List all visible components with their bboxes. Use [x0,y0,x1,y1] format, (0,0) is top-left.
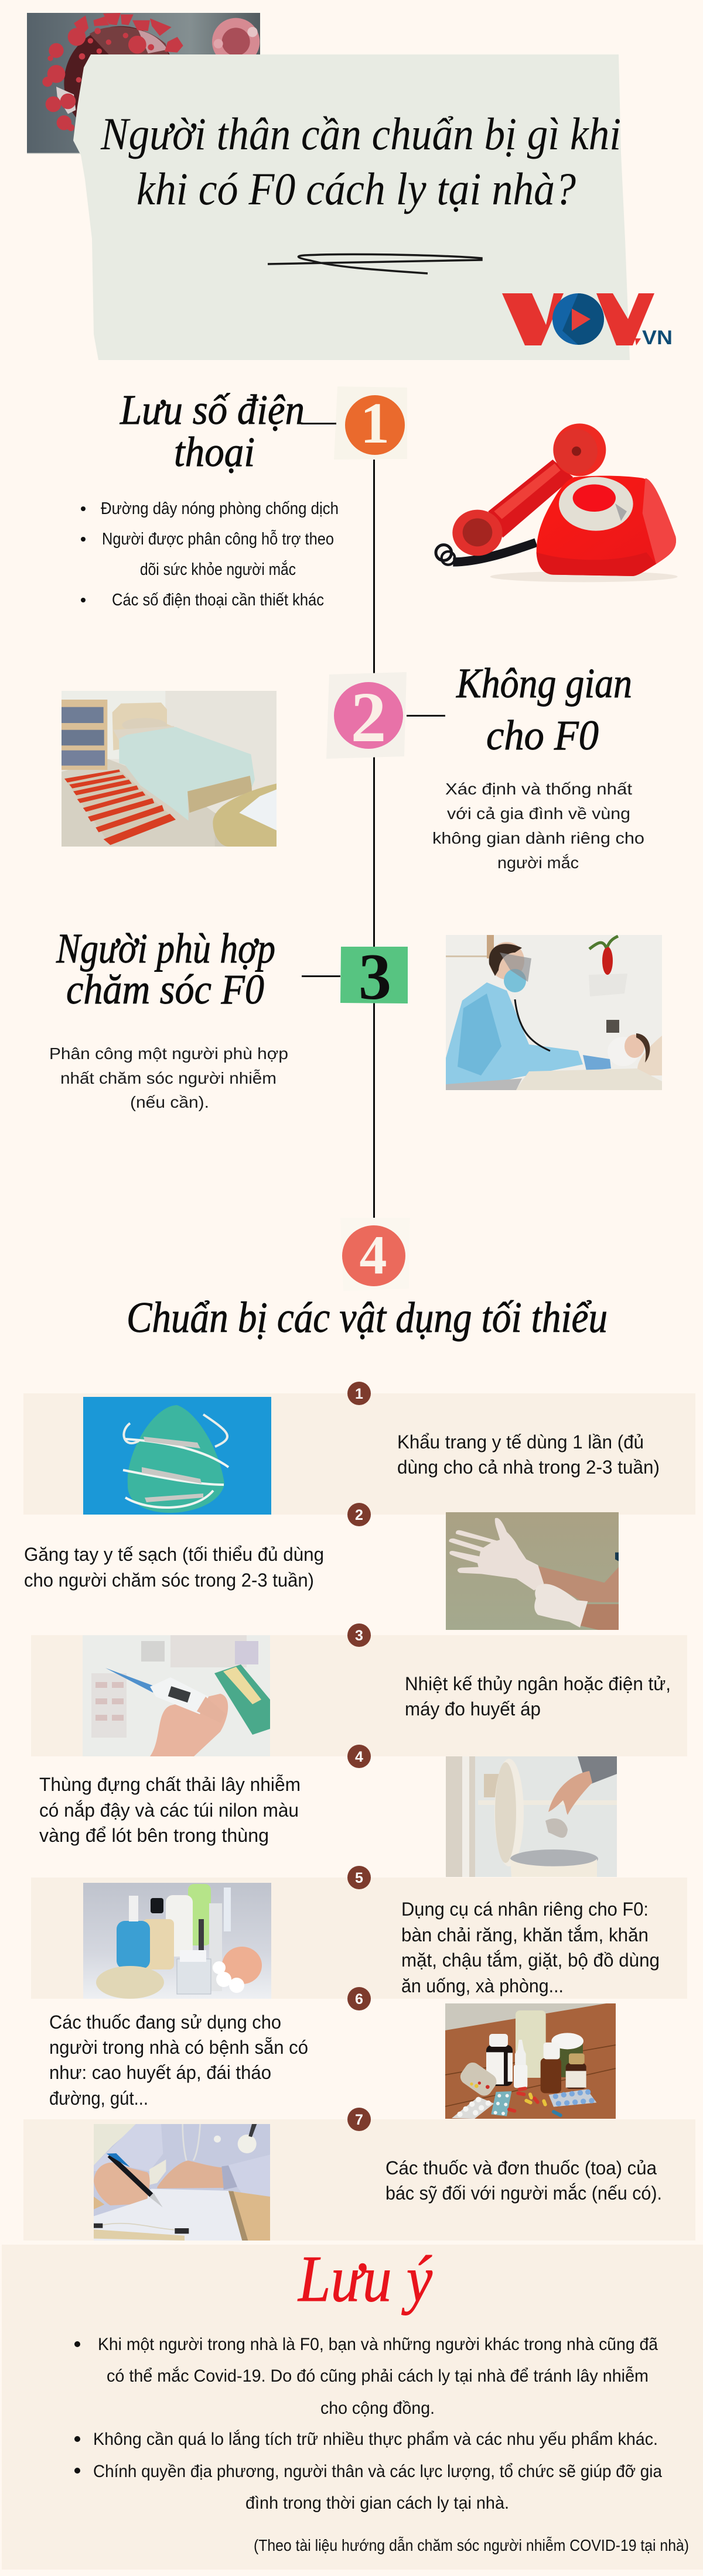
band [31,1635,687,1756]
body text [49,1044,288,1111]
number circle 4: 4 [355,1749,363,1765]
heading: suitable caregiver [56,925,275,1013]
photo: doctor and patient [446,935,662,1090]
number circle 3 [347,1623,371,1647]
photo: medicines [445,2003,616,2119]
photo: isolation bedroom [62,691,277,847]
text [49,2012,308,2109]
number badge 2 [326,672,407,759]
text: Thùng đựng chất thải lây nhiễm [39,1774,301,1795]
text [385,2157,662,2204]
body text: người mắc [497,854,579,872]
number circle 2: 2 [355,1507,363,1523]
band [23,2119,695,2241]
note bullets [74,2335,662,2513]
number circle 1: 1 [355,1386,363,1402]
flourish underline [268,254,482,273]
text: bàn chải răng, khăn tắm, khăn [401,1924,649,1945]
body text: nhất chăm sóc người nhiễm [60,1069,277,1087]
number badge 2: 2 [350,678,387,757]
heading: space for F0: Không gian [456,660,632,707]
body text [432,780,644,872]
list item 6: current medicines [49,1987,616,2119]
body text: (nếu cần). [130,1093,209,1111]
text: Khẩu trang y tế dùng 1 lần (đủ [397,1431,644,1453]
text: như: cao huyết áp, đái tháo [49,2062,271,2083]
body text: Xác định và thống nhất [445,780,632,798]
text: mặt, chậu tắm, giặt, bộ đồ dùng [401,1950,660,1971]
text [401,1899,660,1996]
number badge 1 [334,386,407,460]
number circle 5: 5 [355,1870,363,1886]
band [23,1393,695,1515]
bullet list: Các số điện thoại cần thiết khác [112,591,324,609]
band [31,1878,687,1999]
photo: waste bin [446,1756,617,1877]
number circle 3: 3 [355,1628,363,1644]
text: đường, gút... [49,2088,148,2109]
photo: masks [83,1397,271,1515]
bullet list: dõi sức khỏe người mắc [140,560,296,579]
note bullets: Chính quyền địa phương, người thân và các lực lượng, tổ chức sẽ giúp đỡ gia [93,2462,662,2481]
list item 3: thermometer [31,1623,687,1756]
title line 1: Người thân cần chuẩn bị gì khi [100,108,621,159]
panel: notes [2,2243,703,2570]
text: Nhiệt kế thủy ngân hoặc điện tử, [405,1673,671,1694]
heading: save phone numbers: thoại [174,429,255,475]
bullet list: Người được phân công hỗ trợ theo [102,529,334,549]
step 4 group [127,1218,608,1342]
photo: toiletries [83,1883,271,1999]
logo .VN text: VN [642,327,673,349]
body text: Phân công một người phù hợp [49,1044,288,1063]
connector [407,715,445,717]
timeline vertical line [373,460,375,1220]
text: vàng để lót bên trong thùng [39,1825,269,1846]
heading: space for F0 [456,660,632,759]
number circle 4 [347,1745,371,1768]
heading: space for F0: cho F0 [486,712,599,759]
number circle 1 [347,1382,371,1405]
photo: gloves [446,1512,619,1630]
note bullets: đình trong thời gian cách ly tại nhà. [245,2493,509,2513]
text: dùng cho cả nhà trong 2-3 tuần) [397,1457,660,1478]
number circle 7 [347,2108,371,2131]
panel: torn paper title card [73,54,630,360]
text: Các thuốc và đơn thuốc (toa) của [385,2157,657,2178]
body text: với cả gia đình về vùng [447,804,630,823]
photo: coronavirus [27,13,260,154]
list item 2: medical gloves [24,1503,619,1630]
heading: save phone numbers [120,386,305,475]
number badge 3: 3 [359,941,391,1013]
list item 7: prescriptions [23,2108,695,2241]
number circle 7: 7 [355,2112,363,2128]
number badge 4: 4 [360,1225,387,1286]
step 2 group [62,660,644,872]
heading: suitable caregiver: chăm sóc F0 [66,966,264,1013]
number badge 1: 1 [360,390,390,455]
heading: notes: Lưu ý [297,2243,432,2315]
text: người trong nhà có bệnh sẵn có [49,2037,308,2058]
step 1 group [81,386,678,609]
connector [302,975,340,977]
note bullets: cho cộng đồng. [320,2399,435,2418]
note bullets: Khi một người trong nhà là F0, bạn và những người khác trong nhà cũng đã [98,2335,658,2354]
title line 2: khi có F0 cách ly tại nhà? [136,163,576,214]
number circle 5 [347,1866,371,1889]
body text: không gian dành riêng cho [432,829,644,847]
connector [301,423,336,424]
photo: thermometer [83,1635,270,1756]
note bullets: có thể mắc Covid-19. Do đó cũng phải cách ly tại nhà để tránh lây nhiễm [107,2366,649,2386]
photo: red telephone [436,423,678,582]
number circle 6 [347,1987,371,2010]
text: Các thuốc đang sử dụng cho [49,2012,281,2033]
text: cho người chăm sóc trong 2-3 tuần) [24,1570,314,1591]
text: bác sỹ đối với người mắc (nếu có). [385,2183,662,2204]
logo: VOV.VN [502,293,673,349]
list item 5: personal items [31,1866,687,1999]
text [397,1431,660,1478]
text [39,1774,301,1846]
text [405,1673,671,1719]
bullet list [81,499,339,609]
text: Găng tay y tế sạch (tối thiểu đủ dùng [24,1544,324,1565]
text: máy đo huyết áp [405,1698,541,1719]
text [24,1544,324,1591]
text: có nắp đậy và các túi nilon màu [39,1800,299,1821]
text: Dụng cụ cá nhân riêng cho F0: [401,1899,649,1920]
note bullets: Không cần quá lo lắng tích trữ nhiều thực phẩm và các nhu yếu phẩm khác. [93,2430,658,2449]
step 3 group [49,925,662,1111]
number circle 6: 6 [355,1991,363,2008]
list item 4: waste bin [39,1745,617,1877]
number badge 4 [340,1218,410,1291]
heading: save phone numbers: Lưu số điện [120,386,305,433]
number circle 2 [347,1503,371,1526]
number badge 3 [340,941,408,1013]
bullet list: Đường dây nóng phòng chống dịch [101,499,339,518]
photo: doctor writing [94,2124,270,2241]
heading: minimum supplies: Chuẩn bị các vật dụng tối thiểu [127,1294,608,1342]
text: ăn uống, xà phòng... [401,1975,564,1996]
heading: suitable caregiver: Người phù hợp [56,925,275,972]
list item 1: medical masks [23,1382,695,1515]
